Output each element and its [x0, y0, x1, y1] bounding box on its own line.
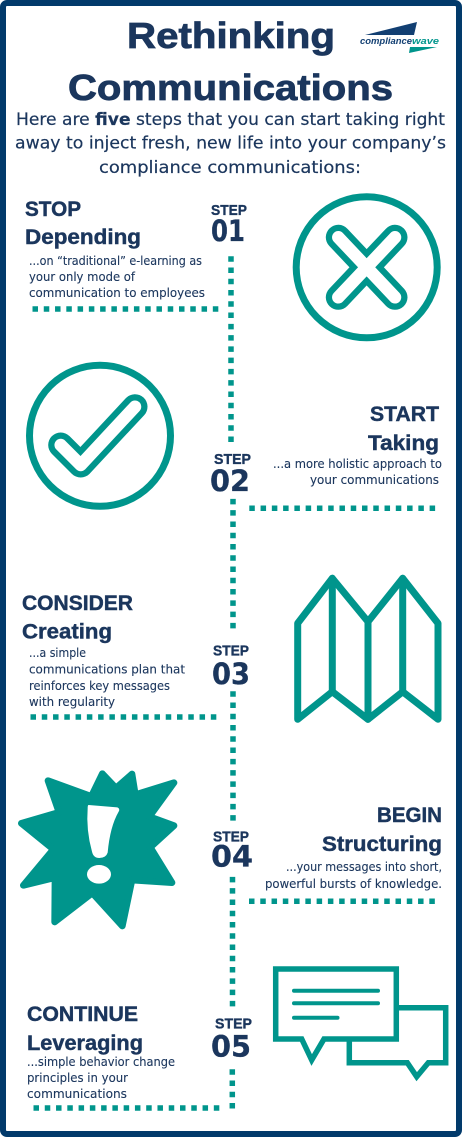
- icon: folded map: [298, 578, 438, 719]
- title: [68, 15, 393, 108]
- step 3 label: STEP: [213, 644, 249, 660]
- step 5 text: continue leveraging: communications: [27, 1087, 127, 1101]
- intro text: away to inject fresh, new life into your company’s: [15, 134, 446, 152]
- step 4 text: begin structuring: BEGIN: [377, 804, 442, 827]
- intro text: compliance communications:: [99, 158, 361, 177]
- icon: check in circle: [30, 365, 170, 506]
- step 3 text: consider creating: CONSIDER: [22, 592, 133, 615]
- icon: chat bubbles: [276, 969, 446, 1077]
- dotted connector 2: [233, 499, 436, 628]
- step 2 label: STEP: [214, 452, 251, 468]
- step 2 text: start taking: START: [370, 403, 439, 426]
- step 5 text: continue leveraging: [27, 1003, 175, 1101]
- step 3 text: consider creating: [22, 592, 185, 709]
- logo: compliancewave: compliance: [360, 36, 413, 47]
- step 5 label: STEP: [215, 1017, 252, 1033]
- intro text: [15, 110, 446, 177]
- step 2 text: start taking: ...a more holistic approach to: [273, 457, 442, 471]
- step 2 label: 02: [210, 464, 250, 498]
- logo: compliancewave: [360, 22, 440, 53]
- step 3 text: consider creating: with regularity: [29, 695, 115, 709]
- title: Communications: [68, 67, 393, 108]
- step 1 label: 01: [211, 214, 245, 248]
- dotted connector 1: [32, 256, 231, 442]
- dotted connector 4: [232, 877, 435, 1006]
- step 5 text: continue leveraging: CONTINUE: [27, 1003, 138, 1026]
- title: Rethinking: [127, 15, 335, 56]
- step 5 text: continue leveraging: Leveraging: [27, 1032, 143, 1055]
- step 4 text: begin structuring: [265, 804, 442, 891]
- step 4 text: begin structuring: ...your messages into short,: [286, 860, 442, 874]
- step 4 text: begin structuring: Structuring: [322, 833, 442, 856]
- step 4 label: STEP: [213, 830, 249, 846]
- step 4 text: begin structuring: powerful bursts of knowledge.: [265, 877, 442, 891]
- step 3 text: consider creating: ...a simple: [29, 646, 86, 660]
- step 1 text: stop depending: communication to employees: [29, 286, 205, 300]
- step 3 label: [212, 644, 250, 691]
- step 1 text: stop depending: [25, 198, 205, 300]
- step 3 text: consider creating: reinforces key messages: [29, 679, 170, 693]
- step 5 label: 05: [211, 1030, 251, 1064]
- step 3 text: consider creating: communications plan that: [29, 663, 185, 677]
- step 5 text: continue leveraging: ...simple behavior change: [27, 1055, 175, 1069]
- logo: compliancewave: wave: [412, 36, 440, 47]
- step 5 text: continue leveraging: principles in your: [27, 1071, 128, 1085]
- step 1 label: STEP: [211, 203, 247, 219]
- step 1 text: stop depending: ...on “traditional” e-learning as: [29, 254, 202, 268]
- step 2 text: start taking: Taking: [368, 432, 439, 455]
- dotted connector 3: [30, 691, 233, 821]
- intro text: Here are five steps that you can start taking right: [16, 110, 446, 129]
- icon: starburst exclamation: [21, 774, 174, 926]
- step 1 text: stop depending: your only mode of: [29, 270, 136, 284]
- step 1 text: stop depending: STOP: [25, 198, 81, 221]
- step 2 text: start taking: [273, 403, 442, 487]
- step 4 label: 04: [211, 840, 253, 874]
- step 1 text: stop depending: Depending: [25, 226, 141, 249]
- dotted connector 5: [34, 1069, 232, 1109]
- step 3 label: 03: [212, 657, 250, 691]
- step 3 text: consider creating: Creating: [22, 621, 112, 644]
- step 2 text: start taking: your communications: [310, 473, 439, 487]
- step 1 label: [211, 203, 247, 248]
- icon: x in circle: [296, 197, 437, 338]
